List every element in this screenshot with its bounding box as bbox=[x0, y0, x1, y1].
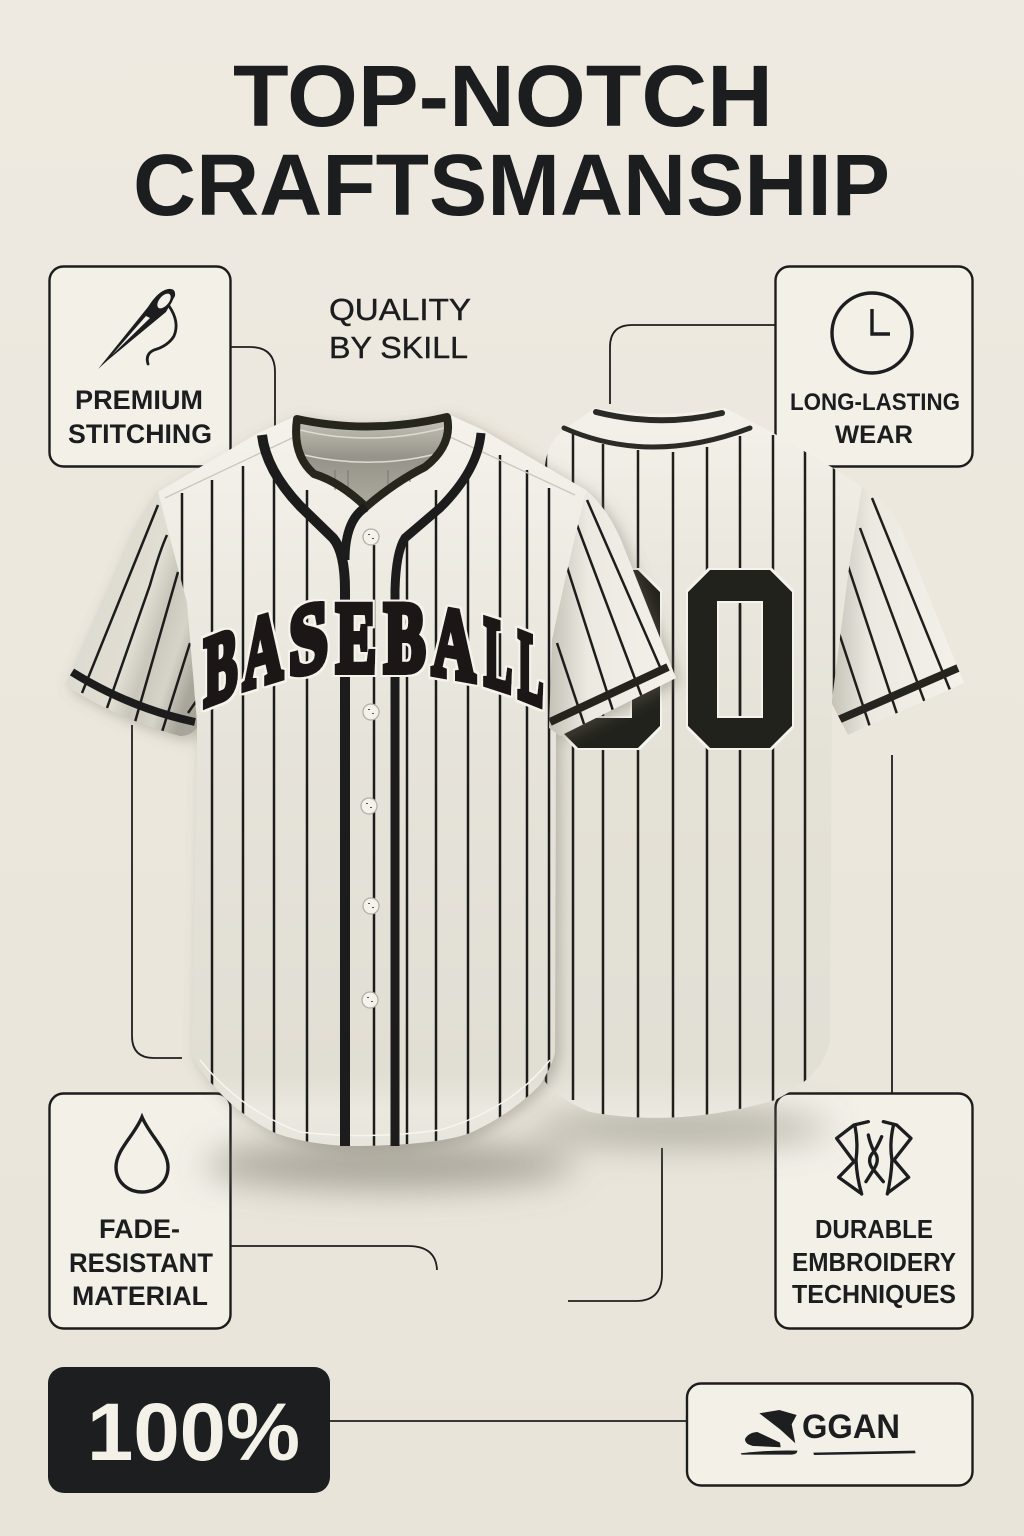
icon: water drop bbox=[116, 1117, 168, 1192]
label: durable embroidery techniques: DURABLE bbox=[815, 1214, 933, 1244]
label: long-lasting wear: WEAR bbox=[835, 421, 913, 449]
connector: premium stitching bbox=[231, 347, 275, 430]
shoulder seams bbox=[165, 436, 575, 498]
label: durable embroidery techniques: EMBROIDERY bbox=[792, 1247, 956, 1277]
baseball lettering: B bbox=[384, 582, 425, 693]
badge: 100% bbox=[48, 1367, 330, 1493]
label: long-lasting wear: LONG-LASTING bbox=[790, 389, 960, 416]
title: CRAFTSMANSHIP bbox=[133, 137, 890, 234]
right sleeve bbox=[549, 490, 676, 736]
back collar bands bbox=[564, 412, 750, 447]
connector: fade-resistant material bbox=[231, 1246, 437, 1270]
baseball lettering: S bbox=[289, 579, 328, 698]
label: fade-resistant material: FADE- bbox=[99, 1214, 180, 1244]
icon: clock bbox=[832, 293, 912, 373]
baseball lettering: L bbox=[484, 597, 512, 714]
card: durable embroidery techniques bbox=[776, 1094, 972, 1328]
back jersey bbox=[540, 408, 964, 1125]
back jersey body bbox=[540, 408, 862, 1118]
baseball lettering: A bbox=[243, 589, 283, 711]
baseball lettering: E bbox=[336, 582, 376, 693]
neck opening bbox=[296, 417, 448, 507]
icon: embroidery knot bbox=[837, 1122, 911, 1194]
baseball lettering: B bbox=[204, 607, 237, 728]
back jersey right sleeve bbox=[830, 487, 964, 735]
buttons bbox=[361, 529, 379, 1008]
connector: left side seam bbox=[132, 725, 182, 1058]
connector: long-lasting wear bbox=[610, 325, 775, 404]
left sleeve bbox=[65, 490, 198, 736]
label: durable embroidery techniques bbox=[792, 1214, 956, 1309]
label: fade-resistant material: RESISTANT bbox=[69, 1248, 213, 1278]
subtitle: quality by skill: BY SKILL bbox=[329, 330, 468, 365]
label: long-lasting wear bbox=[790, 389, 960, 449]
hem stitching bbox=[200, 1060, 550, 1136]
front jersey bbox=[65, 414, 676, 1146]
title bbox=[133, 48, 890, 234]
stripe inside zero bbox=[739, 605, 741, 715]
back numbers bbox=[556, 570, 792, 748]
label: durable embroidery techniques: TECHNIQUES bbox=[792, 1279, 956, 1309]
baseball lettering bbox=[204, 579, 543, 728]
back jersey pinstripes bbox=[546, 433, 834, 1125]
badge: 100%: 100% bbox=[87, 1387, 300, 1478]
subtitle: quality by skill bbox=[329, 292, 471, 365]
card: premium stitching bbox=[50, 266, 230, 466]
label: fade-resistant material: MATERIAL bbox=[72, 1281, 208, 1311]
baseball lettering: A bbox=[432, 585, 475, 702]
connector: 100% to logo bbox=[330, 1420, 687, 1422]
card: long-lasting wear bbox=[776, 266, 972, 466]
label: premium stitching: STITCHING bbox=[68, 419, 212, 449]
subtitle: quality by skill: QUALITY bbox=[329, 292, 471, 327]
shadows under jerseys bbox=[205, 1110, 830, 1189]
label: fade-resistant material bbox=[69, 1214, 213, 1311]
baseball lettering: L bbox=[518, 610, 543, 728]
brand logo card bbox=[687, 1384, 972, 1486]
label: premium stitching: PREMIUM bbox=[75, 385, 203, 415]
card: fade-resistant material bbox=[50, 1094, 230, 1328]
connector: right side bbox=[891, 755, 893, 1094]
front jersey body bbox=[158, 414, 586, 1146]
front pinstripes bbox=[182, 455, 549, 1146]
collar trim and placket bbox=[262, 433, 481, 1146]
label: premium stitching bbox=[68, 385, 212, 449]
brand name: GGAN bbox=[802, 1408, 900, 1446]
connector: hem to embroidery bbox=[568, 1148, 662, 1301]
title: TOP-NOTCH bbox=[233, 48, 773, 145]
icon: needle and thread bbox=[98, 289, 176, 369]
icon: brand mark bbox=[741, 1410, 916, 1455]
